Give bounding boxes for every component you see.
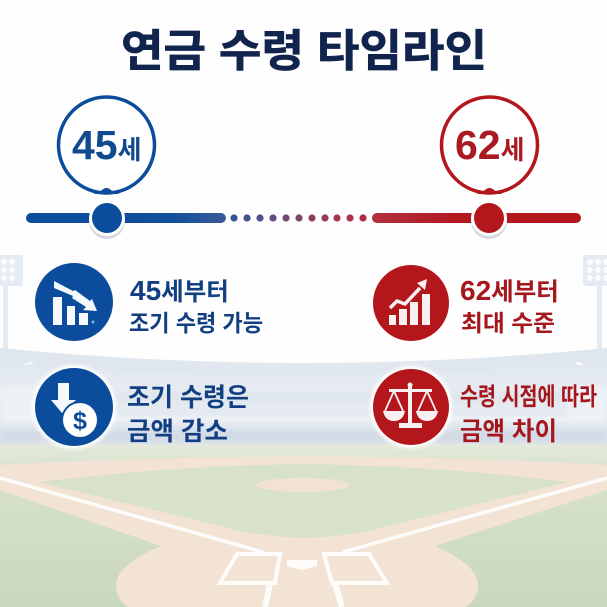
dotted connector: [230, 214, 367, 222]
timeline: [26, 200, 581, 239]
infield grass: [38, 464, 568, 538]
title: 연금 수령 타임라인: [121, 27, 487, 76]
icon: arrow down and coin: [32, 365, 116, 449]
stands: [0, 348, 607, 450]
age marker: 62세: [442, 97, 538, 194]
infield dirt: [0, 456, 607, 607]
text: 조기 수령은 금액 감소: 조기 수령은: [127, 384, 249, 412]
age marker: 62세: 62세: [455, 122, 525, 168]
text: 조기 수령은 금액 감소: [127, 384, 249, 446]
icon: falling bars: [35, 263, 113, 341]
age marker: 45세: 45세: [72, 122, 142, 168]
outfield grass: [0, 444, 607, 607]
text: 62세부터 최대 수준: [460, 275, 559, 336]
icon: balance scale: [370, 366, 452, 448]
text: 45세부터 조기 수령 가능: [129, 275, 263, 336]
home plate: [287, 560, 317, 570]
icon: rising bars: [373, 265, 449, 341]
stand lights: [22, 361, 584, 365]
blue bar segment: [26, 213, 226, 223]
foul lines and batter's boxes: [0, 478, 607, 607]
red bar segment: [372, 213, 581, 223]
node: 45: [89, 200, 125, 239]
text: 45세부터 조기 수령 가능: 45세부터: [130, 275, 229, 306]
stadium light tower right: [583, 255, 607, 351]
text: 수령 시점에 따라 금액 차이: 금액 차이: [460, 418, 557, 446]
node: 62: [471, 200, 507, 239]
text: 62세부터 최대 수준: 최대 수준: [461, 310, 555, 336]
text: 수령 시점에 따라 금액 차이: [460, 383, 597, 446]
text: 45세부터 조기 수령 가능: 조기 수령 가능: [129, 310, 263, 336]
age marker: 45세: [58, 97, 154, 194]
text: 조기 수령은 금액 감소: 금액 감소: [127, 418, 228, 446]
text: 62세부터 최대 수준: 62세부터: [460, 275, 559, 306]
icon: arrow down and coin: $: [73, 407, 87, 435]
pitcher's mound: [256, 478, 350, 492]
stadium light tower left: [0, 255, 23, 351]
